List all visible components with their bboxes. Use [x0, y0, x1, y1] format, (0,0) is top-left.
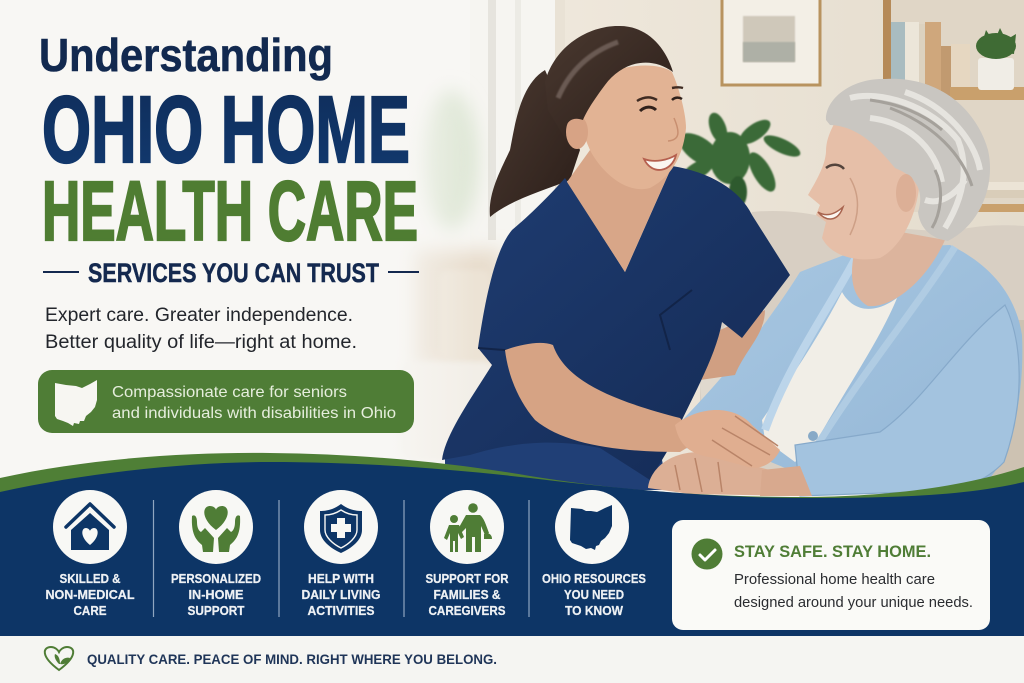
callout text: Compassionate care for seniors — [112, 384, 347, 401]
label: DAILY LIVING — [302, 588, 380, 602]
callout text: and individuals with disabilities in Ohio — [112, 405, 396, 422]
nurse — [442, 26, 790, 490]
curved footer band: green accent — [0, 453, 1024, 500]
icon: shield with cross — [320, 504, 362, 553]
service: Ohio resources — [542, 490, 646, 618]
label: ACTIVITIES — [308, 604, 374, 618]
fade into left text panel — [375, 0, 475, 470]
bookshelf with books and plant — [883, 0, 1024, 212]
nose shadow — [668, 118, 678, 141]
icon: adult and child — [444, 503, 492, 552]
hair top — [545, 26, 673, 140]
label — [542, 572, 646, 618]
label: TO KNOW — [565, 604, 623, 618]
label: HELP WITH — [308, 572, 374, 586]
ponytail — [490, 70, 580, 217]
sofa — [700, 211, 1024, 480]
cardigan placket — [765, 250, 860, 430]
label: CARE — [74, 604, 106, 618]
service: skilled care — [46, 490, 135, 618]
wrinkles — [850, 178, 858, 235]
smile — [644, 155, 676, 170]
label: CAREGIVERS — [428, 604, 506, 618]
icon: Ohio map — [55, 380, 97, 426]
pants — [445, 432, 668, 490]
neck — [852, 225, 945, 306]
card heading: STAY SAFE. STAY HOME. — [734, 542, 931, 561]
ear — [896, 174, 916, 212]
intro text: Expert care. Greater independence. — [45, 305, 353, 326]
stay safe card — [672, 520, 990, 630]
label: PERSONALIZED — [171, 572, 261, 586]
cardigan — [665, 245, 1022, 496]
subtitle with rules: SERVICES YOU CAN TRUST — [88, 258, 379, 288]
card text: designed around your unique needs. — [734, 594, 973, 611]
sleeve — [795, 305, 1019, 496]
face — [581, 66, 686, 189]
service: personalized support — [171, 490, 261, 618]
house plant — [673, 110, 803, 208]
label: NON-MEDICAL — [46, 588, 135, 602]
icon: house with heart — [66, 504, 114, 550]
icon: Ohio map — [570, 505, 612, 550]
green callout — [38, 370, 414, 433]
label: FAMILIES & — [434, 588, 500, 602]
hair — [826, 79, 990, 241]
card text — [734, 571, 973, 611]
eyes and brows — [637, 87, 683, 101]
intro text: Better quality of life—right at home. — [45, 332, 357, 353]
title: Health Care: HEALTH CARE — [42, 164, 418, 258]
label: IN-HOME — [188, 588, 244, 602]
scrub top — [442, 166, 790, 480]
neck and chest — [567, 150, 672, 272]
label: OHIO RESOURCES — [542, 572, 646, 586]
blurred sofa on the left — [400, 270, 495, 460]
curved footer band: navy — [0, 462, 1024, 636]
title: Understanding: Understanding — [39, 29, 333, 81]
icon: hands holding heart — [192, 506, 240, 552]
label — [46, 572, 135, 618]
icon: check mark — [692, 538, 722, 570]
footer tagline: QUALITY CARE. PEACE OF MIND. RIGHT WHERE YOU BELONG. — [87, 651, 497, 667]
sleeve hem and pocket — [478, 290, 692, 352]
callout text — [112, 384, 396, 422]
clasped hands — [648, 410, 812, 496]
icon: heart with leaf — [45, 647, 73, 670]
label — [171, 572, 261, 618]
title: Ohio Home: OHIO HOME — [42, 77, 410, 183]
eye and smile — [826, 165, 844, 169]
forearm — [505, 343, 700, 452]
footer strip — [0, 636, 1024, 683]
framed picture — [722, 0, 820, 85]
face — [808, 116, 920, 259]
senior woman — [665, 79, 1022, 496]
intro text — [45, 305, 357, 353]
service: families and caregivers — [426, 490, 508, 618]
label — [426, 572, 508, 618]
label: SUPPORT — [188, 604, 245, 618]
photo: caregiver holding hands with senior at home — [375, 0, 1024, 496]
label: SUPPORT FOR — [426, 572, 508, 586]
label: YOU NEED — [564, 588, 624, 602]
service: daily living — [302, 490, 380, 618]
ear — [566, 115, 588, 149]
card text: Professional home health care — [734, 571, 935, 588]
label: SKILLED & — [60, 572, 120, 586]
shirt — [762, 292, 897, 462]
label — [302, 572, 380, 618]
divider lines — [154, 500, 529, 617]
room background: wall and window — [400, 0, 1024, 480]
far arm — [700, 310, 765, 380]
